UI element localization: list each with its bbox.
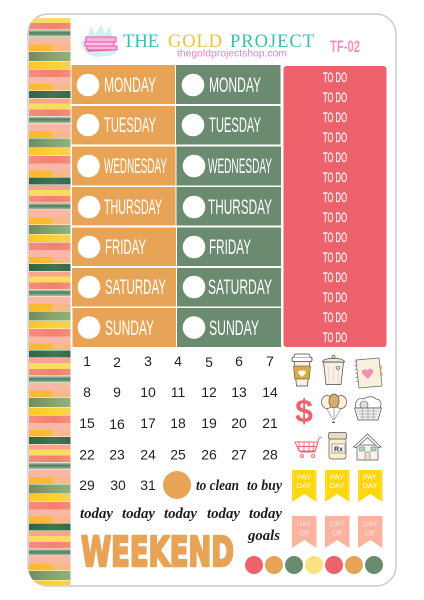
- logo website: thegoldprojectshop.com: [177, 48, 287, 60]
- date numbers: 7: [266, 353, 274, 369]
- script labels: today: [122, 506, 155, 522]
- day off flags: DAY: [330, 519, 344, 528]
- green weekday column: TUESDAY: [209, 114, 261, 137]
- orange weekday column: MONDAY: [104, 74, 156, 97]
- date numbers: [79, 353, 278, 493]
- pay day flags: PAY: [297, 472, 311, 482]
- pay day flags: DAY: [363, 481, 377, 490]
- date numbers: 10: [140, 384, 156, 400]
- script labels: today: [164, 506, 197, 522]
- sheet code: TF-02: [330, 38, 360, 56]
- date numbers: 23: [109, 446, 125, 462]
- day off flags: DAY: [297, 519, 311, 528]
- logo title: THE: [123, 32, 159, 52]
- to do panel: TO DO: [323, 130, 347, 145]
- icon: laundry basket: [354, 397, 382, 420]
- date numbers: 20: [231, 415, 247, 431]
- date numbers: 1: [83, 353, 91, 369]
- script labels: today: [80, 506, 113, 522]
- date numbers: 31: [140, 477, 156, 493]
- green weekday column: WEDNESDAY: [208, 155, 272, 178]
- to do panel: TO DO: [323, 210, 347, 225]
- green weekday column: SATURDAY: [208, 276, 272, 299]
- icon: dollar sign: $: [295, 393, 313, 429]
- orange weekday column: SUNDAY: [105, 317, 154, 340]
- icon: logo stack of books: [80, 24, 117, 57]
- green weekday column: SUNDAY: [209, 317, 259, 340]
- logo title: PROJECT: [230, 32, 314, 52]
- date numbers: 30: [110, 477, 126, 493]
- date numbers: 22: [79, 446, 95, 462]
- orange weekday column: [72, 65, 176, 347]
- to do panel: TO DO: [323, 110, 347, 125]
- to do panel: TO DO: [323, 70, 347, 85]
- date numbers: 25: [170, 446, 186, 462]
- watercolor stripe strip: [29, 4, 71, 600]
- date numbers: 12: [201, 384, 217, 400]
- date numbers: 18: [170, 415, 186, 431]
- icon: notebook: [354, 358, 382, 388]
- day off flags: DAY: [363, 519, 377, 528]
- to do panel: [284, 66, 386, 347]
- date numbers: 27: [231, 446, 247, 462]
- logo title: [123, 32, 314, 52]
- to do panel: TO DO: [323, 190, 347, 205]
- date numbers: 3: [144, 353, 152, 369]
- to do panel: TO DO: [323, 330, 347, 345]
- date numbers: 6: [235, 353, 243, 369]
- orange weekday column: SATURDAY: [105, 276, 166, 299]
- to do panel: TO DO: [323, 230, 347, 245]
- date numbers: 26: [201, 446, 217, 462]
- day off flags: [292, 516, 382, 548]
- logo title: GOLD: [168, 32, 222, 52]
- pay day flags: DAY: [330, 481, 344, 490]
- pay day flags: [292, 470, 382, 502]
- green weekday column: [176, 65, 281, 347]
- to do panel: TO DO: [323, 150, 347, 165]
- orange weekday column: WEDNESDAY: [104, 155, 167, 178]
- icon: balloons: [322, 394, 346, 423]
- logo: [80, 24, 314, 60]
- date numbers: 28: [262, 446, 278, 462]
- pay day flags: PAY: [330, 472, 344, 482]
- day off flags: Off: [332, 528, 343, 538]
- orange dot sticker: [163, 471, 191, 499]
- day off flags: Off: [365, 528, 376, 538]
- date numbers: 8: [83, 384, 91, 400]
- date numbers: 24: [140, 446, 156, 462]
- date numbers: 15: [79, 415, 95, 431]
- script labels: to buy: [247, 478, 282, 494]
- icon: lidded cup: [322, 356, 344, 384]
- date numbers: 29: [79, 477, 95, 493]
- script labels: goals: [247, 528, 280, 544]
- pay day flags: DAY: [297, 481, 311, 490]
- icon: prescription bottle: [328, 432, 346, 459]
- to do panel: TO DO: [323, 90, 347, 105]
- icon: house: [354, 434, 381, 460]
- orange weekday column: FRIDAY: [105, 236, 146, 259]
- orange weekday column: TUESDAY: [104, 114, 156, 137]
- script labels: today: [207, 506, 240, 522]
- icon: prescription bottle: Rx: [334, 446, 343, 454]
- date numbers: 17: [140, 415, 156, 431]
- date numbers: 5: [205, 354, 213, 370]
- date numbers: 9: [113, 384, 121, 400]
- pay day flags: PAY: [363, 472, 377, 482]
- green weekday column: FRIDAY: [209, 236, 251, 259]
- date numbers: 4: [174, 353, 182, 369]
- orange weekday column: THURSDAY: [104, 196, 162, 219]
- to do panel: TO DO: [323, 170, 347, 185]
- icon: coffee cup: [292, 354, 312, 386]
- green weekday column: MONDAY: [209, 74, 261, 97]
- script labels: to clean: [196, 478, 239, 494]
- date numbers: 13: [231, 384, 247, 400]
- to do panel: TO DO: [323, 270, 347, 285]
- date numbers: 19: [201, 415, 217, 431]
- script labels: today: [249, 506, 282, 522]
- date numbers: 2: [113, 354, 121, 370]
- green weekday column: THURSDAY: [208, 196, 272, 219]
- script labels: [80, 478, 282, 544]
- weekend heading: WEEKEND: [81, 528, 234, 576]
- color dots: [245, 556, 383, 574]
- to do panel: TO DO: [323, 250, 347, 265]
- date numbers: 21: [262, 415, 278, 431]
- date numbers: 16: [109, 416, 125, 432]
- icon: shopping cart: [295, 437, 322, 458]
- to do panel: TO DO: [323, 290, 347, 305]
- day off flags: Off: [299, 528, 310, 538]
- date numbers: 11: [171, 384, 185, 400]
- date numbers: 14: [262, 384, 278, 400]
- to do panel: TO DO: [323, 310, 347, 325]
